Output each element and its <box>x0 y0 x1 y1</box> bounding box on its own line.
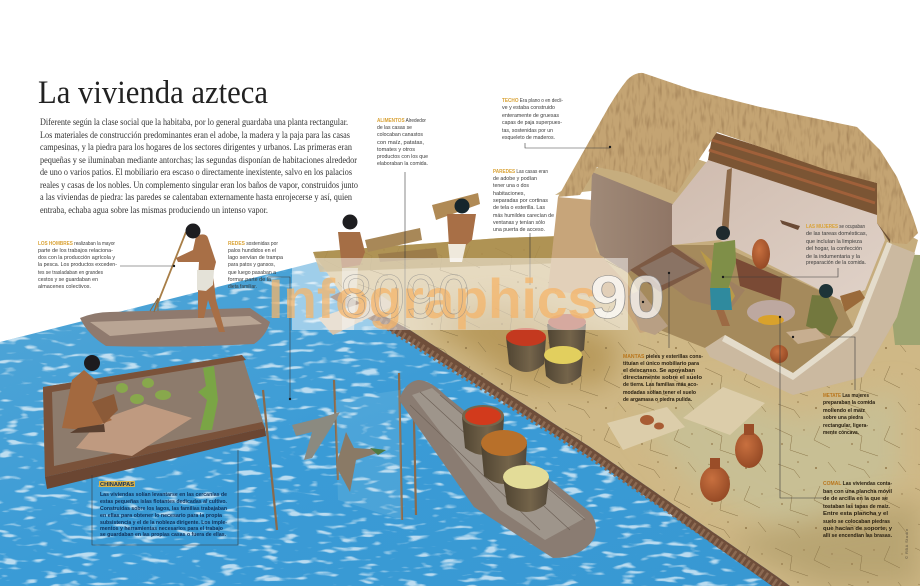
water <box>0 250 800 586</box>
note: los hombres: parte de los trabajos relaciona- <box>38 248 113 254</box>
clay jars <box>700 424 763 502</box>
note: alimentos: con maíz, patatas, <box>377 140 425 146</box>
watermark: 8090 <box>340 263 470 332</box>
note: los hombres <box>38 241 117 290</box>
basket: chillies <box>481 430 527 484</box>
intro text: pequeñas y se iluminaban mediante antorchas; las segundas disponían de habitaciones alrededor <box>40 155 358 166</box>
note: techo: esqueleto de maderos. <box>502 135 555 141</box>
maize plants <box>116 378 171 404</box>
note: chinampas: CHINAMPAS <box>100 482 134 488</box>
wall hanging shelf <box>780 220 800 230</box>
small pot <box>770 345 788 363</box>
note: metate: moliendo el maíz <box>823 408 865 414</box>
note: los hombres: almacenes colectivos. <box>38 284 91 290</box>
note: paredes <box>493 169 554 233</box>
note: chinampas: se guardaban en las propias casas o fuera de ellas. <box>100 532 226 538</box>
basket: tomatoes <box>462 405 504 455</box>
note: metate: preparaban la comida <box>823 400 876 406</box>
intro text <box>40 117 358 216</box>
note: metate: rectangular, ligera- <box>823 423 868 429</box>
note: chinampas <box>99 481 227 538</box>
baskets on land <box>506 314 586 384</box>
title: La vivienda azteca <box>38 75 268 111</box>
note: techo: tas, sostenidas por un <box>502 128 553 134</box>
house <box>548 73 918 395</box>
note: redes: para patos y gansos, <box>228 262 275 268</box>
note: las mujeres: que incluían la limpieza <box>806 239 862 245</box>
log carrier one <box>338 214 438 330</box>
corner post <box>877 183 893 243</box>
note: las mujeres: LAS MUJERES se ocupaban <box>806 224 865 230</box>
note: techo: ve y estaba construido <box>502 105 555 111</box>
tall plants <box>198 366 218 430</box>
note: alimentos: tomates y otros <box>377 147 415 153</box>
note: alimentos: productos con los que <box>377 154 428 160</box>
note: chinampas: en ellas para obtener lo necesario para la propia <box>100 513 223 519</box>
note: las mujeres: de la indumentaria y la <box>806 254 860 260</box>
leader lines <box>92 143 855 545</box>
note: metate: METATE Las mujeres <box>823 393 869 399</box>
intro text: Diferente según la clase social que la habitaba, por lo general guardaba una planta rectangular. <box>40 117 348 128</box>
note: matas: de argamasa o piedra pulida. <box>623 397 692 403</box>
left wall <box>548 197 655 333</box>
note: las mujeres: de las tareas domésticas, <box>806 231 868 237</box>
beam band <box>708 132 877 215</box>
note: alimentos: elaboraban la comida. <box>377 161 428 167</box>
note: las mujeres <box>806 224 868 266</box>
note: metate: sobre una piedra <box>823 415 864 421</box>
watermark: Infographics <box>268 267 598 330</box>
note: matas: tituían el único mobiliario para <box>623 361 700 367</box>
note: comal: suelo se colocaban piedras <box>823 519 890 525</box>
top canoe <box>80 308 270 347</box>
stakes and net <box>263 373 416 530</box>
note: redes: palos hundidos en el <box>228 248 276 254</box>
note: chinampas: subsistencia y el de la nobleza dirigente. Los imple- <box>100 520 227 526</box>
note: alimentos: de las casas se <box>377 125 412 131</box>
note: los hombres: LOS HOMBRES realizaban la mayor <box>38 241 115 247</box>
note: las mujeres: del hogar, la confección <box>806 246 862 252</box>
note: chinampas: mentos y herramientas necesarios para el trabajo <box>100 526 224 532</box>
basket: squash <box>503 465 549 512</box>
kneeling farmer <box>62 355 118 433</box>
note: redes: que luego pasaban a <box>228 270 276 276</box>
note: paredes: PAREDES Las casas eran <box>493 169 548 175</box>
land with adobe floor <box>300 230 920 586</box>
floor <box>628 245 853 373</box>
note: comal: de de arcilla en la que se <box>823 496 888 502</box>
note: matas <box>623 354 703 403</box>
cut wall front <box>705 242 915 395</box>
woman grinding <box>786 284 865 344</box>
note: los hombres: la pesca. Los productos exceden- <box>38 262 117 268</box>
woman with broom <box>700 226 736 326</box>
ducks <box>292 412 386 492</box>
mats <box>607 387 765 450</box>
note: matas: MANTAS pieles y esterillas cons- <box>623 354 703 360</box>
intro text: a las viviendas de piedra: las paredes se calentaban externamente hasta enrojecerse y así, quien <box>40 192 352 203</box>
note: techo: TECHO Era plano o en decli- <box>502 98 563 104</box>
credit: © RBA Studio <box>904 528 909 559</box>
note: matas: directamente sobre el suelo <box>623 375 703 381</box>
note: alimentos: ALIMENTOS Alrededor <box>377 118 426 124</box>
note: comal: Entre esta plancha y el <box>823 511 889 517</box>
note: alimentos <box>377 118 428 167</box>
back wall left room <box>590 172 675 273</box>
note: paredes: de adobe y podían <box>493 176 537 182</box>
grinding stone area <box>747 300 795 324</box>
note: techo: capas de paja superpues- <box>502 120 562 126</box>
note: matas: el descanso. Se apoyaban <box>623 368 695 374</box>
note: paredes: separadas por cortinas <box>493 198 548 204</box>
note: comal <box>823 481 892 539</box>
note: los hombres: cestos y se guardaban en <box>38 277 98 283</box>
note: redes: lago servían de trampa <box>228 255 283 261</box>
note: paredes: de tela o esterilla. Las <box>493 205 545 211</box>
thatched roof <box>558 73 918 244</box>
note: alimentos: colocaban canastos <box>377 132 423 138</box>
note: paredes: una puerta de acceso. <box>493 227 545 233</box>
note: matas: modadas solían tener el suelo <box>623 390 697 396</box>
adobe shell <box>555 140 918 395</box>
note: los hombres: dos con la producción agrícola y <box>38 255 115 261</box>
intro text: reales y casas de los nobles. Un complemento singular eran los baños de vapor, construidos junto <box>40 180 358 191</box>
watermark: 90 <box>590 264 665 331</box>
woven mat <box>76 404 192 456</box>
note: chinampas: Las viviendas solían levantarse en las cercanías de <box>100 492 227 498</box>
chinampa <box>43 355 266 489</box>
bed mat <box>630 245 705 292</box>
note: techo <box>502 98 563 141</box>
low wall left <box>628 290 668 335</box>
tall jar <box>752 239 770 269</box>
note: redes: REDES sostenidas por <box>228 241 278 247</box>
note: comal: COMAL Las viviendas conta- <box>823 481 892 487</box>
note: metate <box>823 393 876 436</box>
note: paredes: tener una o dos <box>493 183 529 189</box>
note: paredes: habitaciones, <box>493 191 525 197</box>
note: metate: mente cóncava. <box>823 430 859 436</box>
note: chinampas: estas pequeñas islas flotantes dedicadas al cultivo. <box>100 499 227 505</box>
note: comal: allí se encendían las brasas. <box>823 533 892 539</box>
stake retaining wall of the bank <box>330 292 790 586</box>
dock planks <box>318 296 395 335</box>
bench <box>735 258 782 300</box>
long canoe <box>399 380 596 558</box>
log carrier two <box>432 193 480 262</box>
note: chinampas: Construidas sobre los lagos, las familias trabajaban <box>100 506 227 512</box>
back wall right room <box>672 160 885 300</box>
intro text: campesinas, y la piedra para los hogares de los sectores dirigentes y urbanos. Las primeras eran <box>40 142 352 153</box>
intro text: de uno o varios patios. El mobiliario era escaso o directamente inexistente, salvo en los palacios <box>40 167 352 178</box>
note: comal: que hacían de soporte, y <box>823 526 892 532</box>
note: paredes: ventanas y tenían sólo <box>493 220 545 226</box>
note: comal: ban con una plancha móvil <box>823 489 892 495</box>
note: techo: enteramente de gruesas <box>502 113 559 119</box>
note: matas: de tierra. Las familias más aco- <box>623 382 698 388</box>
note: redes: dieta familiar. <box>228 284 257 290</box>
note: redes <box>228 241 283 290</box>
note: redes: formar parte de la <box>228 277 271 283</box>
note: paredes: más humildes carecían de <box>493 213 554 219</box>
note: comal: tostaban las tapas de maíz. <box>823 504 890 510</box>
intro text: entraba, echaba agua sobre las mismas produciendo un intenso vapor. <box>40 205 268 216</box>
note: las mujeres: preparación de la comida. <box>806 260 866 266</box>
intro text: Los materiales de construcción predominantes eran el adobe, la madera y la paja para las casas <box>40 130 350 141</box>
man with pole <box>150 224 225 332</box>
note: los hombres: tes se trasladaban en grandes <box>38 270 103 276</box>
